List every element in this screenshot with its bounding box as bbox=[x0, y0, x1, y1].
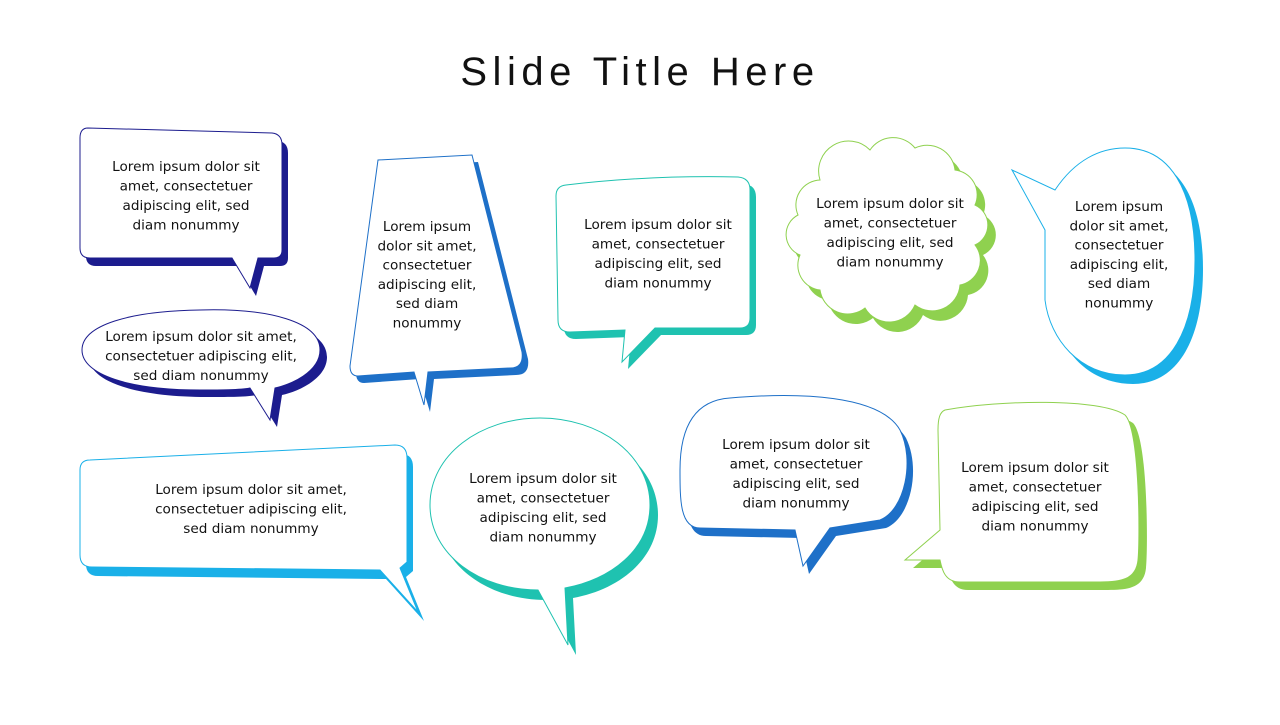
bubble 5: green cloud: adipiscing elit, sed bbox=[826, 235, 954, 251]
bubble 4: teal rectangle: Lorem ipsum dolor sit bbox=[584, 217, 732, 233]
bubble 7: cyan wide rectangle: consectetuer adipiscing elit, bbox=[155, 502, 347, 518]
bubble 3: blue trapezoid: nonummy bbox=[393, 316, 461, 332]
bubble 2: navy oval: Lorem ipsum dolor sit amet, bbox=[105, 329, 297, 345]
bubble 9: blue rounded: Lorem ipsum dolor sit bbox=[722, 437, 870, 453]
bubble 8: teal round: Lorem ipsum dolor sit bbox=[469, 471, 617, 487]
bubble 9: blue rounded: amet, consectetuer bbox=[730, 456, 863, 472]
bubble 7: cyan wide rectangle: sed diam nonummy bbox=[183, 521, 319, 537]
bubble 3: blue trapezoid bbox=[350, 155, 528, 412]
bubble 2: navy oval: consectetuer adipiscing elit, bbox=[105, 348, 297, 364]
bubble 3: blue trapezoid: Lorem ipsum bbox=[383, 219, 471, 235]
bubble 5: green cloud bbox=[786, 138, 996, 332]
bubble 10: green rectangle: diam nonummy bbox=[982, 518, 1088, 534]
bubble 2: navy oval: sed diam nonummy bbox=[133, 368, 269, 384]
bubble 9: blue rounded: diam nonummy bbox=[742, 496, 850, 512]
bubble 9: blue rounded: adipiscing elit, sed bbox=[732, 476, 860, 492]
bubble 6: cyan tall oval: sed diam bbox=[1088, 276, 1150, 292]
bubble 8: teal round: diam nonummy bbox=[490, 530, 596, 546]
bubble 1: navy rectangle: adipiscing elit, sed bbox=[122, 198, 250, 214]
bubble 5: green cloud: diam nonummy bbox=[836, 254, 944, 270]
bubble 4: teal rectangle: diam nonummy bbox=[604, 276, 712, 292]
bubble 1: navy rectangle: amet, consectetuer bbox=[120, 178, 253, 194]
bubble 7: cyan wide rectangle bbox=[80, 445, 424, 621]
bubble 4: teal rectangle bbox=[556, 177, 756, 369]
bubble 7: cyan wide rectangle: Lorem ipsum dolor sit amet, bbox=[155, 482, 347, 498]
bubble 6: cyan tall oval bbox=[1012, 148, 1203, 384]
bubble 3: blue trapezoid: dolor sit amet, bbox=[377, 238, 477, 254]
bubble 1: navy rectangle: Lorem ipsum dolor sit bbox=[112, 159, 260, 175]
bubble 6: cyan tall oval: dolor sit amet, bbox=[1069, 218, 1169, 234]
bubble 3: blue trapezoid: adipiscing elit, bbox=[378, 277, 476, 293]
bubble 6: cyan tall oval: nonummy bbox=[1085, 296, 1153, 312]
bubble 10: green rectangle: amet, consectetuer bbox=[969, 480, 1102, 496]
bubble 10: green rectangle: Lorem ipsum dolor sit bbox=[961, 460, 1109, 476]
bubble 9: blue rounded bbox=[680, 396, 913, 574]
bubble 3: blue trapezoid: consectetuer bbox=[383, 258, 472, 274]
title: Slide Title Here bbox=[460, 50, 820, 94]
bubble 6: cyan tall oval: consectetuer bbox=[1075, 238, 1164, 254]
bubble 5: green cloud: amet, consectetuer bbox=[824, 216, 957, 232]
bubble 1: navy rectangle bbox=[80, 128, 288, 296]
bubble 1: navy rectangle: diam nonummy bbox=[132, 218, 240, 234]
bubble 6: cyan tall oval: adipiscing elit, bbox=[1070, 257, 1168, 273]
bubble 8: teal round bbox=[430, 418, 658, 655]
bubble 2: navy oval bbox=[82, 310, 327, 427]
bubble 10: green rectangle: adipiscing elit, sed bbox=[971, 499, 1099, 515]
bubble 5: green cloud: Lorem ipsum dolor sit bbox=[816, 196, 964, 212]
bubble 8: teal round: amet, consectetuer bbox=[477, 490, 610, 506]
bubble 3: blue trapezoid: sed diam bbox=[396, 296, 458, 312]
bubble 4: teal rectangle: amet, consectetuer bbox=[592, 236, 725, 252]
bubble 10: green rectangle bbox=[905, 402, 1147, 590]
bubble 6: cyan tall oval: Lorem ipsum bbox=[1075, 199, 1163, 215]
bubble 4: teal rectangle: adipiscing elit, sed bbox=[594, 256, 722, 272]
bubble 8: teal round: adipiscing elit, sed bbox=[479, 510, 607, 526]
